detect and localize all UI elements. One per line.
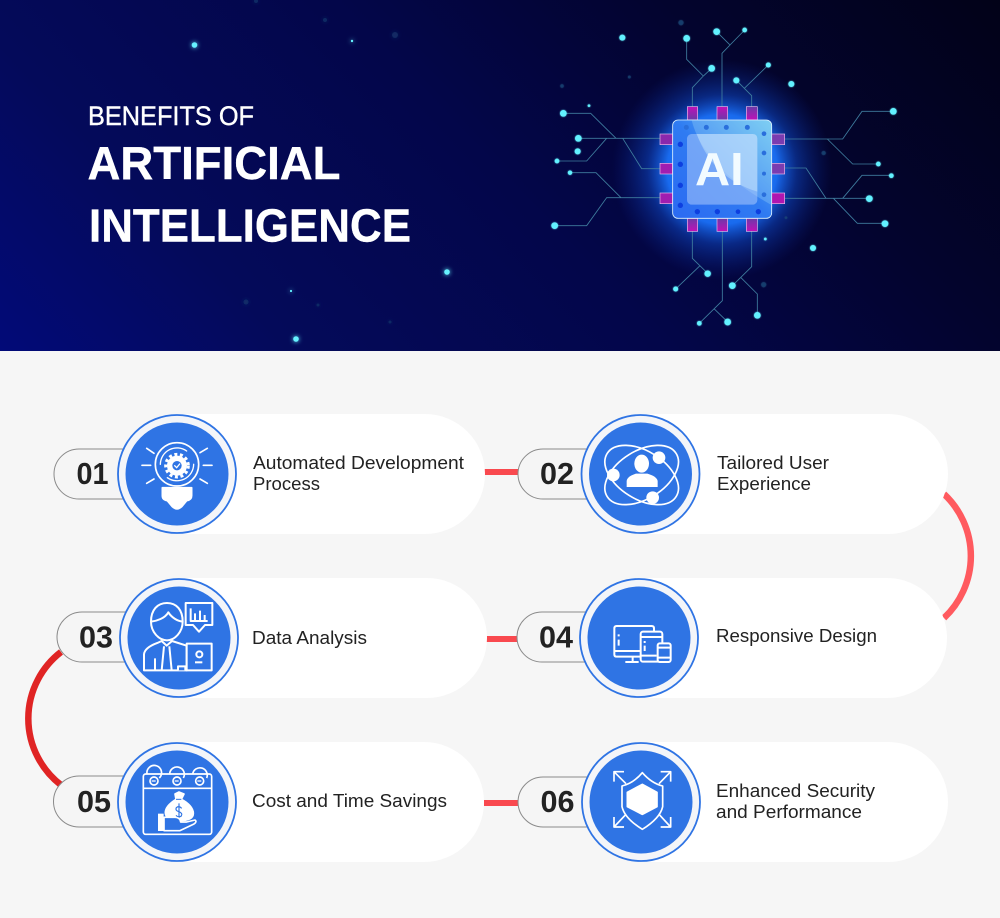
card [177, 414, 485, 534]
chip contact dots [678, 125, 766, 214]
connector: 03 to 04 [486, 636, 519, 642]
icon: shield with arrows [614, 772, 671, 829]
number: 01 [76, 456, 108, 491]
label: Responsive Design [716, 626, 877, 646]
label: Enhanced Security [716, 781, 875, 801]
panel: step 06 [518, 742, 948, 862]
icon badge [582, 415, 700, 533]
chip inner panel [687, 134, 757, 205]
label: Experience [717, 474, 811, 494]
number pill [517, 612, 615, 662]
icon: analyst with chart [144, 603, 212, 670]
number: 02 [540, 456, 574, 491]
panel: step 04 [517, 578, 947, 698]
number: 05 [77, 784, 111, 819]
connector: 05 to 06 [484, 800, 520, 806]
icon: responsive devices [614, 626, 671, 662]
panel: step 03 [57, 578, 487, 698]
icon: atom user [594, 433, 689, 517]
icon badge [118, 415, 236, 533]
icon badge [580, 579, 698, 697]
number pill [54, 776, 150, 827]
chip label: AI [695, 143, 744, 195]
icon badge [118, 743, 236, 861]
title: ARTIFICIAL [88, 137, 340, 189]
chip illustration [551, 20, 897, 326]
panel: step 05 [54, 742, 484, 862]
number pill [57, 612, 150, 662]
background particles [192, 0, 450, 342]
label [253, 453, 464, 494]
chip glow [612, 59, 832, 279]
label: Process [253, 474, 320, 494]
circuit nodes [551, 20, 897, 326]
number: 03 [79, 620, 113, 654]
title: INTELLIGENCE [89, 200, 411, 252]
panel: step 02 [518, 414, 948, 534]
label: and Performance [716, 802, 862, 822]
number: 04 [539, 620, 574, 654]
connector pads [660, 107, 785, 231]
card [639, 578, 947, 698]
connector: 02 to 04 arc [944, 494, 971, 618]
title: BENEFITS OF [88, 101, 254, 131]
card [177, 742, 484, 862]
icon badge [582, 743, 700, 861]
label: Data Analysis [252, 628, 367, 648]
icon badge [120, 579, 238, 697]
number pill [54, 449, 150, 499]
title [88, 101, 411, 252]
panel: step 01 [54, 414, 485, 534]
card [641, 742, 948, 862]
number pill [518, 777, 615, 827]
label: Cost and Time Savings [252, 791, 447, 811]
card [640, 414, 948, 534]
label: Tailored User [717, 453, 829, 473]
chip body [673, 120, 772, 218]
label [717, 453, 829, 494]
number pill [518, 449, 615, 499]
icon: money calendar [143, 765, 212, 834]
card [179, 578, 487, 698]
connector: 01 to 02 [484, 469, 520, 475]
icon: lightbulb gear [142, 443, 212, 509]
panel: header banner [0, 0, 1000, 351]
label: Automated Development [253, 453, 464, 473]
label [716, 781, 875, 822]
connector: 03 to 05 arc [28, 652, 61, 785]
number: 06 [540, 784, 574, 819]
circuit traces [555, 30, 893, 323]
